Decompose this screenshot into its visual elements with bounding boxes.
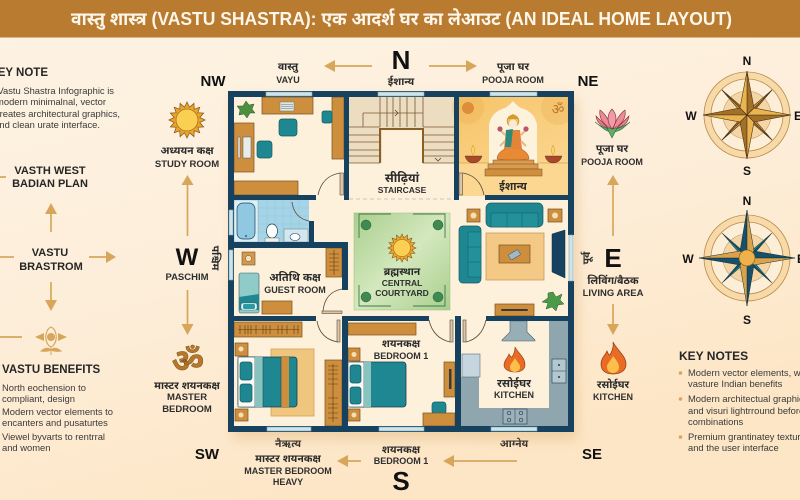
plant and console [495, 292, 564, 316]
icon: flame [601, 342, 626, 374]
top direction labels: ईशान्य [388, 75, 415, 88]
icon: om: ॐ [172, 343, 204, 379]
room: guest: अतिथि कक्ष [269, 271, 321, 284]
floor plan [228, 91, 575, 432]
arrow: west down [182, 290, 194, 335]
panel: vastu benefits: Viewel byvarts to rentrral [2, 431, 105, 442]
panel: key notes: vasture Indian benefits [688, 378, 783, 389]
label: west direction [165, 244, 222, 283]
label: pooja room east: POOJA ROOM [581, 157, 643, 167]
panel: key notes: and the user interface [688, 442, 779, 453]
courtyard [354, 213, 450, 310]
label: corner NW: NW [200, 73, 226, 90]
compass labels: top: W [685, 109, 697, 123]
label: study room: अध्ययन कक्ष [160, 145, 214, 157]
panel: vastu benefits [2, 364, 113, 453]
icon: vastu lotus emblem [35, 327, 67, 355]
top direction labels: वास्तु [278, 61, 299, 74]
label: east direction [580, 243, 644, 299]
label: east direction: E [604, 243, 622, 273]
panel: vastu benefits: encanters and pusaturtes [2, 417, 108, 428]
compass labels: bottom: W [682, 252, 694, 266]
bottom direction labels: आग्नेय [500, 436, 529, 450]
panel: vastu benefits: Modern vector elements to [2, 406, 113, 417]
doors [317, 173, 486, 342]
bottom direction labels: S [392, 466, 410, 496]
room: kitchen [461, 321, 568, 426]
room: staircase: सीढ़ियां [385, 170, 420, 185]
bottom direction labels: HEAVY [273, 477, 303, 487]
top direction labels: VAYU [276, 75, 300, 85]
label: kitchen east: रसोईघर [597, 378, 630, 391]
label: east direction: पूर्व [580, 251, 594, 264]
steps and diyas [465, 145, 562, 176]
label: master bedroom west: MASTER [167, 392, 207, 403]
panel: vastu benefits: and women [2, 442, 50, 453]
label: west direction: पश्चिम [209, 246, 222, 270]
icon: sun [169, 102, 205, 138]
room: bedroom 1: शयनकक्ष [382, 338, 421, 350]
left flow diagram [0, 165, 116, 337]
bottom direction labels [244, 436, 529, 496]
room: bedroom 1: BEDROOM 1 [374, 351, 428, 361]
room: staircase [349, 97, 454, 199]
left flow diagram: VASTH WEST [14, 165, 86, 177]
top direction labels: N [392, 45, 410, 75]
plan shadow [232, 98, 578, 440]
label: pooja room east: पूजा घर [596, 143, 628, 156]
bottom direction labels: मास्टर शयनकक्ष [255, 453, 322, 465]
room: kitchen: रसोईघर [497, 377, 532, 390]
room: pooja: ॐ [552, 101, 565, 117]
niche and deity [489, 101, 537, 163]
icon: lotus [595, 109, 630, 138]
compass labels: top: N [743, 54, 751, 68]
room: bathroom [234, 200, 309, 242]
left flow diagram: VASTU [32, 247, 68, 259]
label: east direction: लिविंग/बैठक [587, 274, 639, 287]
room: living area [459, 203, 565, 283]
bottom direction labels: BEDROOM 1 [374, 456, 428, 466]
panel: key notes: KEY NOTES [679, 349, 748, 363]
courtyard: ब्रह्मस्थान [384, 266, 421, 278]
panel: key notes: combinations [688, 416, 744, 427]
floor plan base [228, 91, 574, 432]
compass: top gold [703, 71, 791, 159]
bottom direction labels: नैऋत्य [275, 437, 301, 450]
label: master bedroom west: BEDROOM [162, 404, 212, 415]
room: master bedroom [234, 322, 342, 426]
label: master bedroom west [154, 380, 221, 415]
label: master bedroom west: मास्टर शयनकक्ष [154, 380, 221, 392]
label: east direction: LIVING AREA [583, 288, 644, 299]
room: guest [239, 248, 342, 314]
label: corner NE: NE [578, 73, 598, 90]
room: pooja [452, 91, 575, 196]
top direction labels [276, 45, 544, 88]
left flow diagram: BADIAN PLAN [12, 178, 88, 190]
top direction labels: पूजा घर [497, 61, 529, 74]
label: study room [155, 145, 219, 170]
label: study room: STUDY ROOM [155, 159, 219, 170]
room: bedroom 1 [348, 323, 455, 426]
label: kitchen east: KITCHEN [593, 392, 633, 402]
walls [228, 91, 574, 432]
arrow: east down [607, 304, 619, 335]
label: west direction: PASCHIM [165, 272, 209, 283]
panel: key notes [679, 349, 800, 453]
top direction labels: POOJA ROOM [482, 75, 544, 85]
panel: left key note [0, 67, 120, 130]
bottom direction labels: शयनकक्ष [382, 444, 421, 456]
title banner: वास्तु शास्त्र (VASTU SHASTRA): एक आदर्श घर का लेआउट (AN IDEAL HOME LAYOUT) [71, 7, 732, 31]
panel: vastu benefits: VASTU BENEFITS [2, 364, 101, 376]
compass labels: top [685, 54, 800, 178]
courtyard: COURTYARD [375, 288, 429, 298]
panel: vastu benefits: North eochension to [2, 382, 86, 393]
compass labels: bottom: N [743, 194, 751, 208]
label: corner SE: SE [582, 446, 602, 463]
label: kitchen east [593, 378, 633, 402]
bottom direction labels: MASTER BEDROOM [244, 466, 332, 476]
compass labels: bottom: S [743, 313, 751, 327]
compass: bottom teal [699, 210, 795, 306]
courtyard: CENTRAL [382, 278, 422, 288]
panel: vastu benefits: compliant, design [2, 393, 75, 404]
compass labels: bottom [682, 194, 800, 327]
room: guest: GUEST ROOM [264, 285, 326, 295]
room: study [234, 97, 344, 195]
room: kitchen: KITCHEN [494, 390, 534, 400]
windows [229, 92, 573, 431]
left flow diagram: BRASTROM [19, 261, 83, 273]
arrow: east up [607, 175, 619, 236]
label: corner SW: SW [195, 446, 220, 463]
panel: left key note: Vastu Shastra Infographic is [0, 85, 114, 96]
arrow: west up [182, 175, 194, 236]
label: west direction: W [176, 244, 199, 271]
label: pooja room east [581, 143, 643, 167]
title banner [0, 0, 800, 38]
compass labels: top: S [743, 164, 751, 178]
room: pooja: ईशान्य [499, 180, 528, 193]
room: staircase: STAIRCASE [378, 185, 427, 195]
